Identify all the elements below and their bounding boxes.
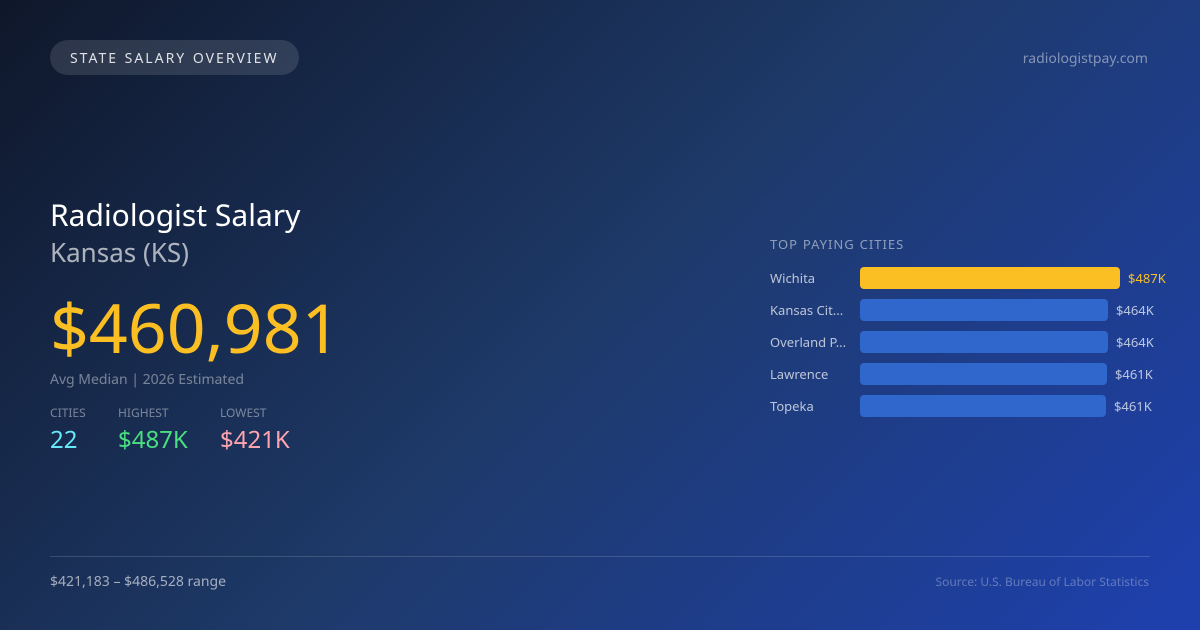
- footer divider: [50, 556, 1150, 557]
- badge: state salary overview: [50, 40, 299, 75]
- stat: highest: $487K: [118, 423, 188, 456]
- row: Wichita: Wichita: [770, 269, 815, 287]
- stat: cities: 22: [50, 423, 77, 456]
- salary range: $421,183 – $486,528 range: [50, 572, 226, 591]
- row: Overland Park: Overland P...: [770, 333, 846, 351]
- subtitle: state: Kansas (KS): [50, 234, 189, 270]
- row: Kansas City: Kansas Cit...: [770, 301, 843, 319]
- row: Kansas City: $464K: [1116, 301, 1154, 319]
- stat: lowest: $421K: [220, 423, 290, 456]
- stat: lowest: LOWEST: [220, 404, 266, 421]
- row: Lawrence: Lawrence: [770, 365, 828, 383]
- stat: highest: HIGHEST: [118, 404, 169, 421]
- row: Lawrence: [770, 363, 1153, 385]
- row: Overland Park: [770, 331, 1154, 353]
- row: Overland Park: $464K: [1116, 333, 1154, 351]
- stat: highest: [118, 404, 188, 456]
- row: Wichita: [770, 267, 1166, 289]
- row: Kansas City: [770, 299, 1154, 321]
- stat: lowest: [220, 404, 290, 456]
- salary caption: Avg Median | 2026 Estimated: [50, 370, 244, 389]
- stat: cities: [50, 404, 86, 456]
- stat: cities: CITIES: [50, 404, 86, 421]
- row: Topeka: [770, 395, 1152, 417]
- title: Radiologist Salary: [50, 194, 300, 235]
- row: Topeka: Topeka: [770, 397, 814, 415]
- row: Lawrence: $461K: [1115, 365, 1153, 383]
- row: Topeka: $461K: [1114, 397, 1152, 415]
- chart heading: TOP PAYING CITIES: [770, 235, 904, 253]
- source: Source: U.S. Bureau of Labor Statistics: [936, 573, 1149, 590]
- site name: radiologistpay.com: [1023, 49, 1148, 68]
- badge: state salary overview: STATE SALARY OVERVIEW: [70, 49, 278, 68]
- row: Wichita: $487K: [1128, 269, 1166, 287]
- headline salary figure: $460,981: [50, 280, 340, 373]
